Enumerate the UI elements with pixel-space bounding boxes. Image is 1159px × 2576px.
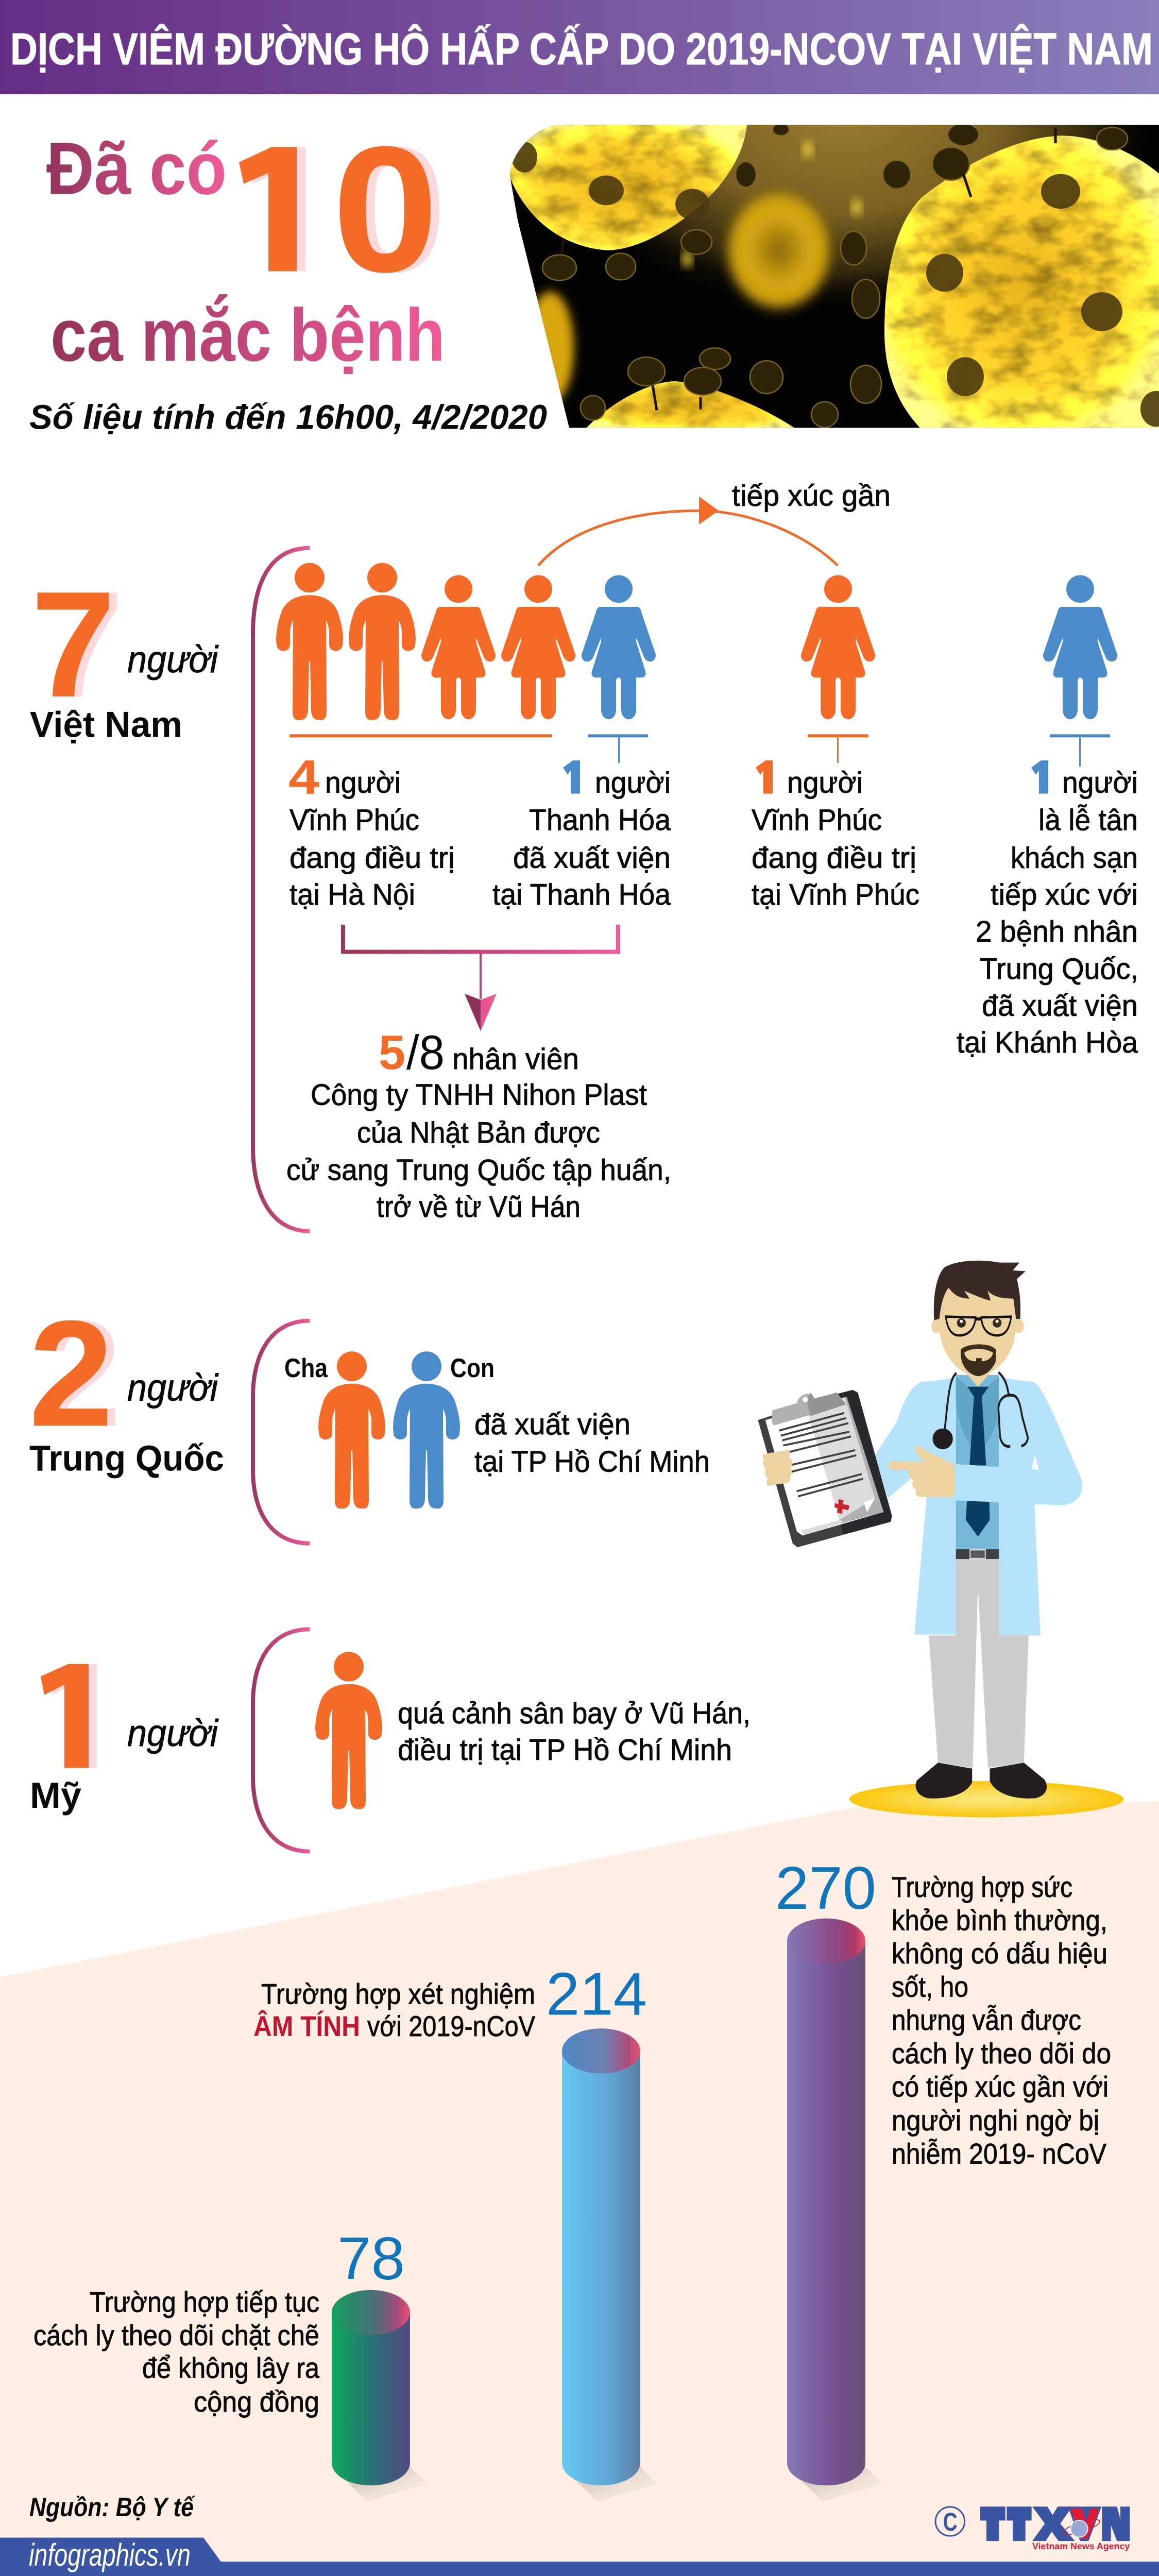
- text: 4 người Vĩnh Phúc: Vĩnh Phúc: [289, 804, 419, 837]
- big number 10: 0: [341, 109, 447, 309]
- text: 270 cases: [892, 1871, 1111, 2170]
- number 7: 7: [31, 561, 115, 729]
- text: 78 cases: cách ly theo dõi chặt chẽ: [33, 2319, 319, 2351]
- text: 1 người Thanh Hóa: tại Thanh Hóa: [492, 878, 671, 911]
- text: 1 người Vĩnh Phúc: [752, 750, 919, 911]
- text: 270 cases: có tiếp xúc gần với: [892, 2071, 1109, 2103]
- text: 270 cases: cách ly theo dõi do: [892, 2037, 1111, 2070]
- bar: 270: 270: [775, 1854, 876, 1922]
- text: 78 cases: [33, 2286, 320, 2418]
- text: transit: điều trị tại TP Hồ Chí Minh: [398, 1734, 732, 1767]
- icon: man: [315, 1652, 382, 1809]
- label: người: người: [127, 638, 219, 681]
- text: 1 người Vĩnh Phúc: người: [787, 767, 863, 799]
- doctor illustration: [758, 1261, 1123, 1817]
- stethoscope: [933, 1372, 1028, 1448]
- text: 270 cases: nhưng vẫn được: [892, 2004, 1081, 2036]
- label: người: người: [127, 1711, 219, 1754]
- text: 1 người Vĩnh Phúc: đang điều trị: [752, 842, 916, 875]
- bar: 270: [775, 1854, 882, 2501]
- copyright mark: [935, 2507, 965, 2536]
- label: Việt Nam: Việt Nam: [30, 704, 182, 744]
- big number 10: 1: [231, 109, 332, 309]
- coat: [875, 1377, 1082, 1635]
- label: Trung Quốc: Trung Quốc: [29, 1438, 224, 1479]
- statistics background: [0, 1801, 1159, 2576]
- bracket: [253, 548, 310, 1231]
- text: 4 người Vĩnh Phúc: [288, 750, 455, 911]
- source: Nguồn: Bộ Y tế: [29, 2492, 196, 2522]
- virus image: [510, 125, 1159, 428]
- text: 1 người Thanh Hóa: [492, 750, 671, 911]
- text: 214 cases: ÂM TÍNH: [253, 2010, 360, 2042]
- text: 1 người lễ tân: 1: [1030, 750, 1059, 804]
- text: 270 cases: khỏe bình thường,: [892, 1904, 1107, 1936]
- text: 270 cases: người nghi ngờ bị: [892, 2104, 1099, 2137]
- label: Cha: Cha: [284, 1353, 328, 1383]
- number 1: [41, 1664, 97, 1768]
- text: 1 người Thanh Hóa: 1: [561, 750, 590, 804]
- text: 1 người Vĩnh Phúc: tại Vĩnh Phúc: [752, 878, 919, 911]
- shirt, tie, belt: [956, 1375, 999, 1559]
- tagline: Vietnam News Agency: [1032, 2541, 1130, 2551]
- text: 214 cases: Trường hợp xét nghiệm: [261, 1978, 535, 2010]
- text: 1 người Vĩnh Phúc: 1: [754, 750, 783, 804]
- label: Con: Con: [450, 1353, 495, 1383]
- text: 1 người lễ tân: tại Khánh Hòa: [957, 1026, 1138, 1059]
- text: 270 cases: sốt, ho: [892, 1971, 968, 2003]
- text: 5/8 nhân viên: trở về từ Vũ Hán: [377, 1191, 581, 1224]
- number 2: 2: [29, 1290, 113, 1458]
- text: 5/8 nhân viên: 5: [379, 1025, 405, 1079]
- icons: father and son: [318, 1351, 460, 1509]
- text: 1 người lễ tân: đã xuất viện: [982, 990, 1138, 1023]
- bar chart: [33, 1854, 1111, 2501]
- bar: 214: 214: [546, 1960, 647, 2027]
- text: 270 cases: không có dấu hiệu: [892, 1937, 1107, 1970]
- text: 214 cases: [253, 1978, 535, 2042]
- text: 270 cases: Trường hợp sức: [892, 1871, 1072, 1903]
- text: 78 cases: để không lây ra: [142, 2352, 320, 2384]
- yellow platform: [849, 1781, 1123, 1817]
- head: [931, 1261, 1026, 1387]
- connector lines: [289, 734, 1110, 767]
- text: 78 cases: Trường hợp tiếp tục: [90, 2286, 319, 2318]
- text: 5/8 nhân viên: cử sang Trung Quốc tập huấn,: [286, 1154, 671, 1187]
- text: ca mắc bệnh: ca mắc bệnh: [50, 293, 445, 377]
- text: 4 người Vĩnh Phúc: người: [325, 767, 401, 799]
- text: 1 người lễ tân: Trung Quốc,: [980, 953, 1138, 986]
- trousers: [929, 1559, 1029, 1768]
- header banner: [0, 0, 1159, 94]
- date note: Số liệu tính đến 16h00, 4/2/2020: [29, 399, 547, 436]
- big number 10: 1: [240, 109, 340, 309]
- text: 5/8 nhân viên: [286, 1025, 671, 1224]
- text: 1 người Thanh Hóa: Thanh Hóa: [529, 804, 671, 837]
- bracket: [253, 1321, 310, 1544]
- text: 270 cases: nhiễm 2019- nCoV: [892, 2138, 1106, 2170]
- text: transit: quá cảnh sân bay ở Vũ Hán,: [398, 1697, 751, 1730]
- copyright mark: C: [943, 2507, 958, 2536]
- text: 5/8 nhân viên: của Nhật Bản được: [357, 1116, 600, 1149]
- label: Mỹ: Mỹ: [30, 1775, 81, 1816]
- merge bracket and arrow: [343, 925, 618, 1031]
- text: 1 người lễ tân: tiếp xúc với: [991, 878, 1138, 911]
- bar: 214: [546, 1960, 657, 2501]
- text: 1 người Thanh Hóa: người: [595, 767, 671, 799]
- big number 10: [239, 146, 439, 273]
- text: 1 người lễ tân: là lễ tân: [1038, 804, 1138, 837]
- text: 1 người Thanh Hóa: đã xuất viện: [513, 842, 671, 875]
- headline: 10 cases: [29, 109, 547, 436]
- number 1: 1: [33, 1632, 118, 1800]
- text: 4 người Vĩnh Phúc: đang điều trị: [289, 842, 455, 875]
- label: tiếp xúc gần: tiếp xúc gần: [732, 480, 891, 512]
- text: transit: [398, 1697, 751, 1767]
- bracket: [253, 1629, 310, 1852]
- text: 1 người lễ tân: khách sạn: [1011, 842, 1138, 875]
- text: discharged: tại TP Hồ Chí Minh: [474, 1446, 710, 1479]
- number 1: 1: [42, 1632, 126, 1800]
- text: 1 người lễ tân: người: [1062, 767, 1138, 799]
- logo: TTXVN: [935, 2506, 1130, 2551]
- text: discharged: [474, 1408, 710, 1479]
- text: 214 cases: với 2019-nCoV: [367, 2010, 535, 2042]
- text: 4 người Vĩnh Phúc: 4: [288, 750, 319, 804]
- text: 5/8 nhân viên: Công ty TNHH Nihon Plast: [311, 1079, 647, 1111]
- footer bar: [0, 2537, 1159, 2576]
- bar: 78: [332, 2225, 427, 2501]
- text: 78 cases: cộng đồng: [194, 2385, 319, 2418]
- section: 2 người Trung Quốc: [29, 1290, 710, 1544]
- label: người: người: [127, 1366, 219, 1409]
- text: discharged: đã xuất viện: [474, 1408, 630, 1441]
- pointing hand: [889, 1446, 955, 1498]
- section: 1 người Mỹ: [30, 1629, 751, 1852]
- wordmark: [980, 2506, 1130, 2541]
- number 2: 2: [37, 1290, 122, 1458]
- site name: infographics.vn: [29, 2537, 191, 2573]
- text: 5/8 nhân viên: nhân viên: [452, 1043, 579, 1076]
- shoes: [916, 1762, 1047, 1799]
- text: 1 người lễ tân: [957, 750, 1138, 1059]
- text: 4 người Vĩnh Phúc: tại Hà Nội: [289, 878, 415, 911]
- number 7: 7: [39, 561, 124, 729]
- arrow: close contact arc: [538, 496, 838, 566]
- icons: people: [276, 563, 1117, 720]
- text: 1 người lễ tân: 2 bệnh nhân: [976, 916, 1138, 948]
- text: 5/8 nhân viên: /8: [406, 1025, 445, 1079]
- bar: 78: 78: [337, 2225, 405, 2292]
- section: 7 người Việt Nam: [30, 480, 1138, 1231]
- text: 1 người Vĩnh Phúc: Vĩnh Phúc: [752, 804, 882, 837]
- clipboard: [758, 1390, 892, 1547]
- text: Đã có: Đã có: [46, 127, 227, 210]
- big number 10: 0: [332, 109, 438, 309]
